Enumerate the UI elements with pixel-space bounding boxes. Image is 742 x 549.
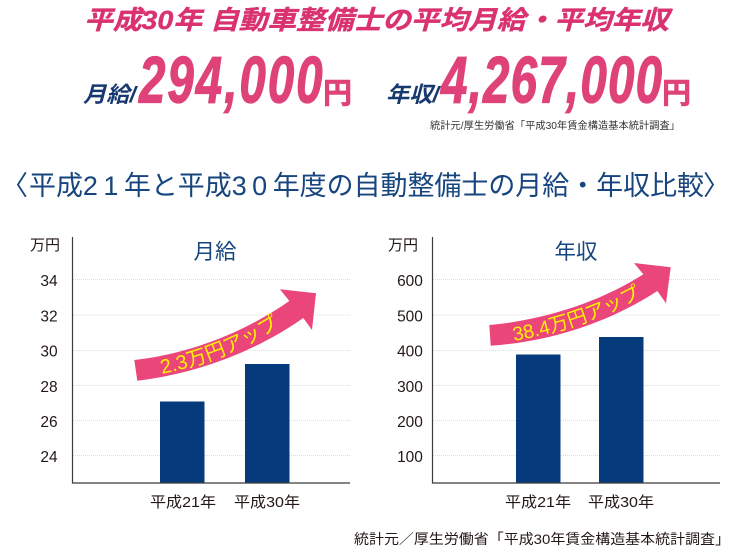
monthly salary figure <box>83 44 352 117</box>
chart: monthly salary <box>30 237 350 511</box>
source note bottom: 統計元／厚生労働省「平成30年賃金構造基本統計調査」 <box>354 531 730 547</box>
bar: Heisei 30 <box>599 337 644 483</box>
subtitle: 〈 <box>1 171 28 201</box>
title: 平成30年 自動車整備士の平均月給・平均年収 <box>84 5 673 35</box>
annual income figure <box>386 44 691 117</box>
label: annual income: 年収/ <box>386 82 442 107</box>
y axis unit: 万円 <box>388 237 418 254</box>
chart: annual income <box>388 237 720 511</box>
arrow: rising <box>134 289 316 381</box>
bar: Heisei 21 <box>516 354 560 483</box>
y axis labels <box>40 273 58 466</box>
x axis labels: 平成21年 <box>505 494 571 511</box>
label: monthly salary: 月給/ <box>83 82 139 107</box>
arrow: rising <box>489 263 671 346</box>
x axis labels: 平成30年 <box>588 494 654 511</box>
y axis labels: 24 <box>40 449 58 466</box>
subtitle: 平成21年と平成30年度の自動整備士の月給・年収比較 <box>29 171 704 201</box>
chart title: 月給 <box>193 240 237 264</box>
value: 4,267,000 yen: 4,267,000 <box>440 44 662 117</box>
x axis labels <box>150 494 300 511</box>
arrow label: 2.3万円アップ <box>160 313 272 374</box>
y axis unit: 万円 <box>30 237 60 254</box>
axes <box>72 237 350 483</box>
unit: yen: 円 <box>323 78 352 110</box>
x axis labels <box>505 494 654 511</box>
bar: Heisei 21 <box>160 402 204 483</box>
y axis labels: 34 <box>40 273 58 290</box>
y axis labels: 400 <box>397 344 423 360</box>
y axis labels: 100 <box>397 449 423 466</box>
bar: Heisei 30 <box>245 364 290 483</box>
y axis labels: 500 <box>397 308 423 326</box>
unit: yen: 円 <box>662 78 691 110</box>
x axis labels: 平成21年 <box>150 494 216 511</box>
y axis labels: 200 <box>397 414 423 431</box>
axes <box>432 237 720 483</box>
y axis labels: 32 <box>40 308 58 326</box>
value: 294,000 yen: 294,000 <box>138 44 323 117</box>
arrow label: 38.4万円アップ <box>513 284 636 340</box>
source note top: 統計元/厚生労働省「平成30年賃金構造基本統計調査」 <box>430 119 680 132</box>
subtitle: 〉 <box>703 171 730 201</box>
y axis labels: 600 <box>397 273 423 290</box>
y axis labels: 30 <box>40 344 58 360</box>
y axis labels: 300 <box>397 379 423 396</box>
y axis labels <box>397 273 423 466</box>
chart title: 年収 <box>554 240 598 264</box>
y axis labels: 28 <box>40 379 58 396</box>
y axis labels: 26 <box>40 414 58 431</box>
x axis labels: 平成30年 <box>234 494 300 511</box>
